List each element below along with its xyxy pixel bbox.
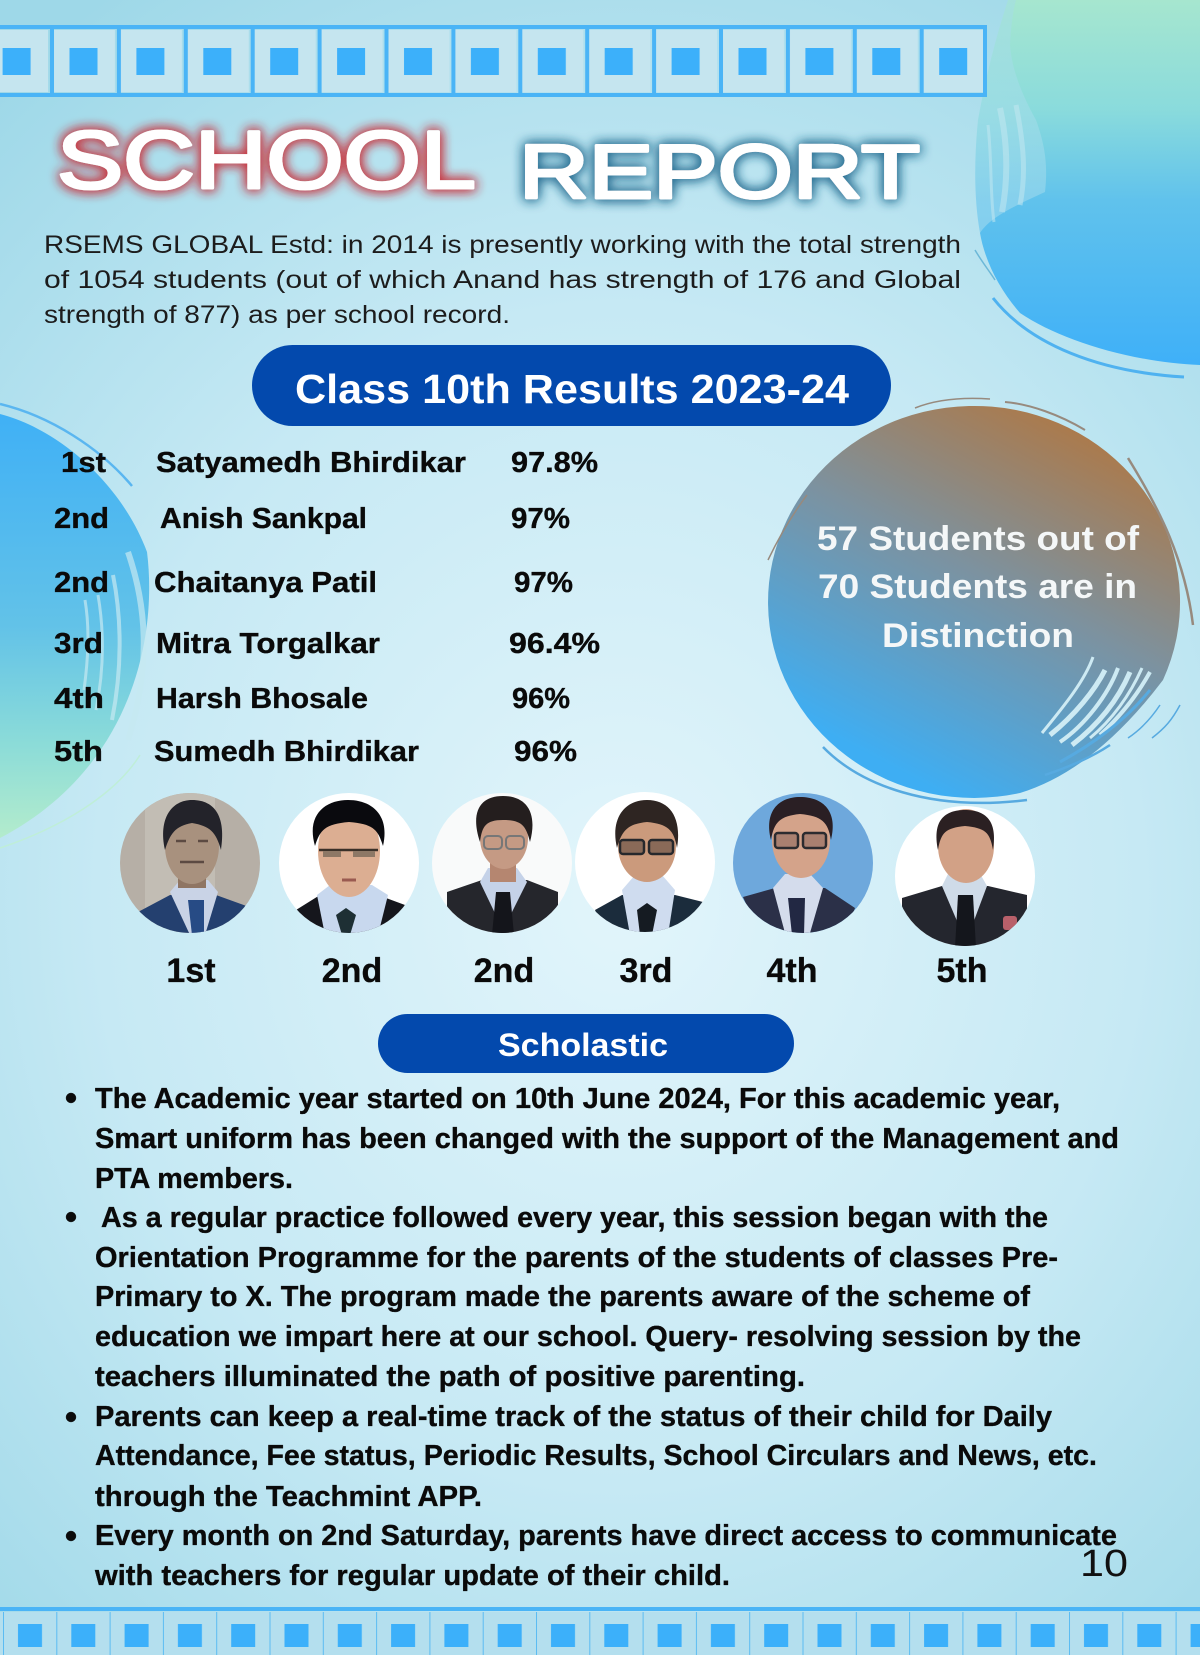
row 4	[54, 628, 600, 660]
portrait rank labels: 5th	[936, 952, 988, 990]
bullet 4: Every month on 2nd Saturday, parents have direct access to communicate	[95, 1520, 1117, 1552]
bullet 1: Smart uniform has been changed with the support of the Management and	[95, 1123, 1119, 1155]
portrait 6	[895, 806, 1035, 948]
row 1	[61, 447, 598, 479]
portrait 1	[120, 793, 260, 935]
row 3	[54, 567, 573, 599]
bullet 1	[66, 1083, 1119, 1195]
row 2: 2nd	[54, 503, 109, 535]
callout text: 70 Students are in	[818, 568, 1137, 606]
row 6: 5th	[54, 736, 103, 768]
bullet 2: education we impart here at our school. Query- resolving session by the	[95, 1321, 1081, 1353]
row 4: 3rd	[54, 628, 103, 660]
title word: SCHOOL: SCHOOL	[57, 115, 476, 206]
bullet 3: Attendance, Fee status, Periodic Results, School Circulars and News, etc.	[95, 1440, 1097, 1472]
row 6	[54, 736, 577, 768]
row 1: 97.8%	[511, 447, 598, 479]
bullet 3: through the Teachmint APP.	[95, 1481, 482, 1513]
row 6: Sumedh Bhirdikar	[154, 736, 419, 768]
bullet 2	[66, 1202, 1081, 1393]
bullet 1: The Academic year started on 10th June 2024, For this academic year,	[95, 1083, 1060, 1115]
portrait rank labels: 2nd	[322, 952, 382, 990]
results table	[54, 447, 600, 768]
heading pill: Class 10th Results: Class 10th Results 2023-24	[295, 366, 849, 412]
callout: distinction brush circle	[768, 398, 1193, 803]
intro paragraph	[44, 231, 961, 329]
callout text: 57 Students out of	[817, 520, 1140, 558]
scholastic bullet list	[66, 1083, 1119, 1592]
callout text	[817, 520, 1140, 655]
row 1: 1st	[61, 447, 106, 479]
row 3: 97%	[514, 567, 573, 599]
portrait 4	[575, 792, 715, 935]
intro paragraph: RSEMS GLOBAL Estd: in 2014 is presently working with the total strength	[44, 231, 961, 259]
portrait 5	[733, 793, 873, 935]
bullet 4: with teachers for regular update of their child.	[94, 1560, 730, 1592]
title word: REPORT: REPORT	[519, 130, 920, 215]
portrait 3	[432, 793, 572, 935]
row 5: 96%	[512, 683, 570, 715]
bullet 3	[66, 1401, 1097, 1513]
intro paragraph: of 1054 students (out of which Anand has strength of 176 and Global	[44, 266, 961, 294]
row 3: 2nd	[54, 567, 109, 599]
row 5: Harsh Bhosale	[156, 683, 368, 715]
portrait 2	[279, 793, 419, 935]
bullet 1: PTA members.	[95, 1163, 293, 1195]
bottom decorative strip	[0, 1607, 1200, 1655]
portrait rank labels: 2nd	[474, 952, 534, 990]
page number: 10	[1080, 1543, 1128, 1585]
bullet 2: teachers illuminated the path of positive parenting.	[95, 1361, 805, 1393]
row 3: Chaitanya Patil	[154, 567, 377, 599]
heading pill: Scholastic: Scholastic	[498, 1027, 668, 1063]
title	[57, 115, 920, 215]
row 2: Anish Sankpal	[160, 503, 367, 535]
row 5	[54, 683, 570, 715]
top decorative strip	[0, 25, 987, 97]
row 4: Mitra Torgalkar	[156, 628, 380, 660]
row 5: 4th	[54, 683, 104, 715]
heading pill: Scholastic	[378, 1014, 794, 1073]
bullet 2: Orientation Programme for the parents of the students of classes Pre-	[95, 1242, 1058, 1274]
heading pill: Class 10th Results	[252, 345, 891, 426]
bullet 4	[66, 1520, 1117, 1592]
decorative blob: top right	[975, 0, 1200, 377]
portrait rank labels: 4th	[766, 952, 818, 990]
row 4: 96.4%	[509, 628, 600, 660]
row 2: 97%	[511, 503, 570, 535]
row 6: 96%	[514, 736, 577, 768]
intro paragraph: strength of 877) as per school record.	[44, 301, 510, 329]
bullet 3: Parents can keep a real-time track of the status of their child for Daily	[95, 1401, 1052, 1433]
portrait rank labels: 3rd	[620, 952, 672, 990]
row 1: Satyamedh Bhirdikar	[156, 447, 466, 479]
bullet 2: Primary to X. The program made the parents aware of the scheme of	[95, 1281, 1030, 1313]
bullet 2: As a regular practice followed every year, this session began with the	[101, 1202, 1048, 1234]
portrait rank labels: 1st	[166, 952, 216, 990]
portrait rank labels	[166, 952, 988, 990]
decorative blob: left	[0, 404, 149, 848]
callout text: Distinction	[882, 617, 1074, 655]
row 2	[54, 503, 570, 535]
